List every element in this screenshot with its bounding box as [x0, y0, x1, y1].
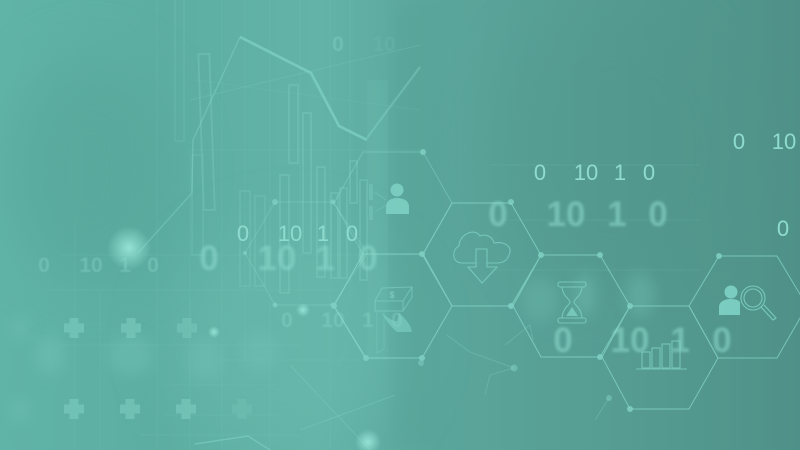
hexagon node dots — [331, 149, 722, 412]
binary digits blurred large: 0 — [358, 239, 378, 278]
binary digits blurred large: 1 — [315, 239, 335, 278]
icon: person with magnifying glass — [719, 286, 776, 320]
binary digits blurred large: 0 — [488, 195, 508, 234]
binary digits sharp: 10 — [278, 221, 302, 246]
binary digits faint: 0 — [147, 254, 159, 277]
binary digits blurred large: 0 — [553, 321, 573, 360]
binary digits blurred large: 10 — [611, 321, 649, 360]
binary digits sharp: 0 — [237, 221, 249, 246]
icon: bar chart — [636, 341, 687, 369]
binary digits faint: 0 — [281, 309, 293, 332]
binary digits blurred large — [199, 195, 732, 360]
binary digits sharp: 10 — [772, 129, 796, 154]
hexagon network — [334, 152, 800, 409]
binary digits sharp: 0 — [643, 160, 655, 185]
binary digits blurred large: 1 — [670, 321, 690, 360]
binary digits blurred large: 0 — [648, 195, 668, 234]
faint network lower middle — [290, 325, 609, 450]
binary digits sharp: 1 — [614, 160, 626, 185]
glow sparks — [107, 226, 381, 450]
binary digits sharp: 0 — [733, 129, 745, 154]
binary digits blurred large: 10 — [547, 195, 585, 234]
icon: hourglass — [558, 282, 586, 323]
icon: money stack and hand — [375, 287, 412, 353]
binary digits faint: 0 — [391, 309, 403, 332]
binary digits sharp: 0 — [777, 216, 789, 241]
binary digits blurred large: 10 — [258, 239, 296, 278]
binary digits blurred large: 0 — [199, 239, 219, 278]
binary digits faint: 0 — [38, 254, 50, 277]
binary digits faint: 1 — [362, 309, 374, 332]
icon: person — [386, 184, 409, 214]
binary digits faint: 0 — [332, 33, 344, 56]
network left hexagon — [245, 202, 367, 358]
binary digits faint — [38, 33, 403, 332]
plus signs — [64, 318, 252, 419]
binary digits faint: 10 — [321, 309, 345, 332]
binary digits sharp — [237, 129, 796, 246]
binary digits sharp: 10 — [574, 160, 598, 185]
icon: small people connection — [371, 184, 386, 220]
binary digits faint: 10 — [79, 254, 103, 277]
binary digits sharp: 0 — [534, 160, 546, 185]
binary digits sharp: 1 — [317, 221, 329, 246]
icon: money stack and hand: $ — [389, 290, 395, 300]
binary digits faint: 10 — [372, 33, 396, 56]
binary digits blurred large: 1 — [607, 195, 627, 234]
candlestick chart — [175, 0, 367, 293]
binary digits faint: 1 — [119, 254, 131, 277]
network dots left — [243, 199, 336, 308]
binary digits blurred large: 0 — [712, 321, 732, 360]
binary digits sharp: 0 — [346, 221, 358, 246]
icon: cloud download — [454, 232, 510, 283]
line chart — [138, 37, 420, 450]
